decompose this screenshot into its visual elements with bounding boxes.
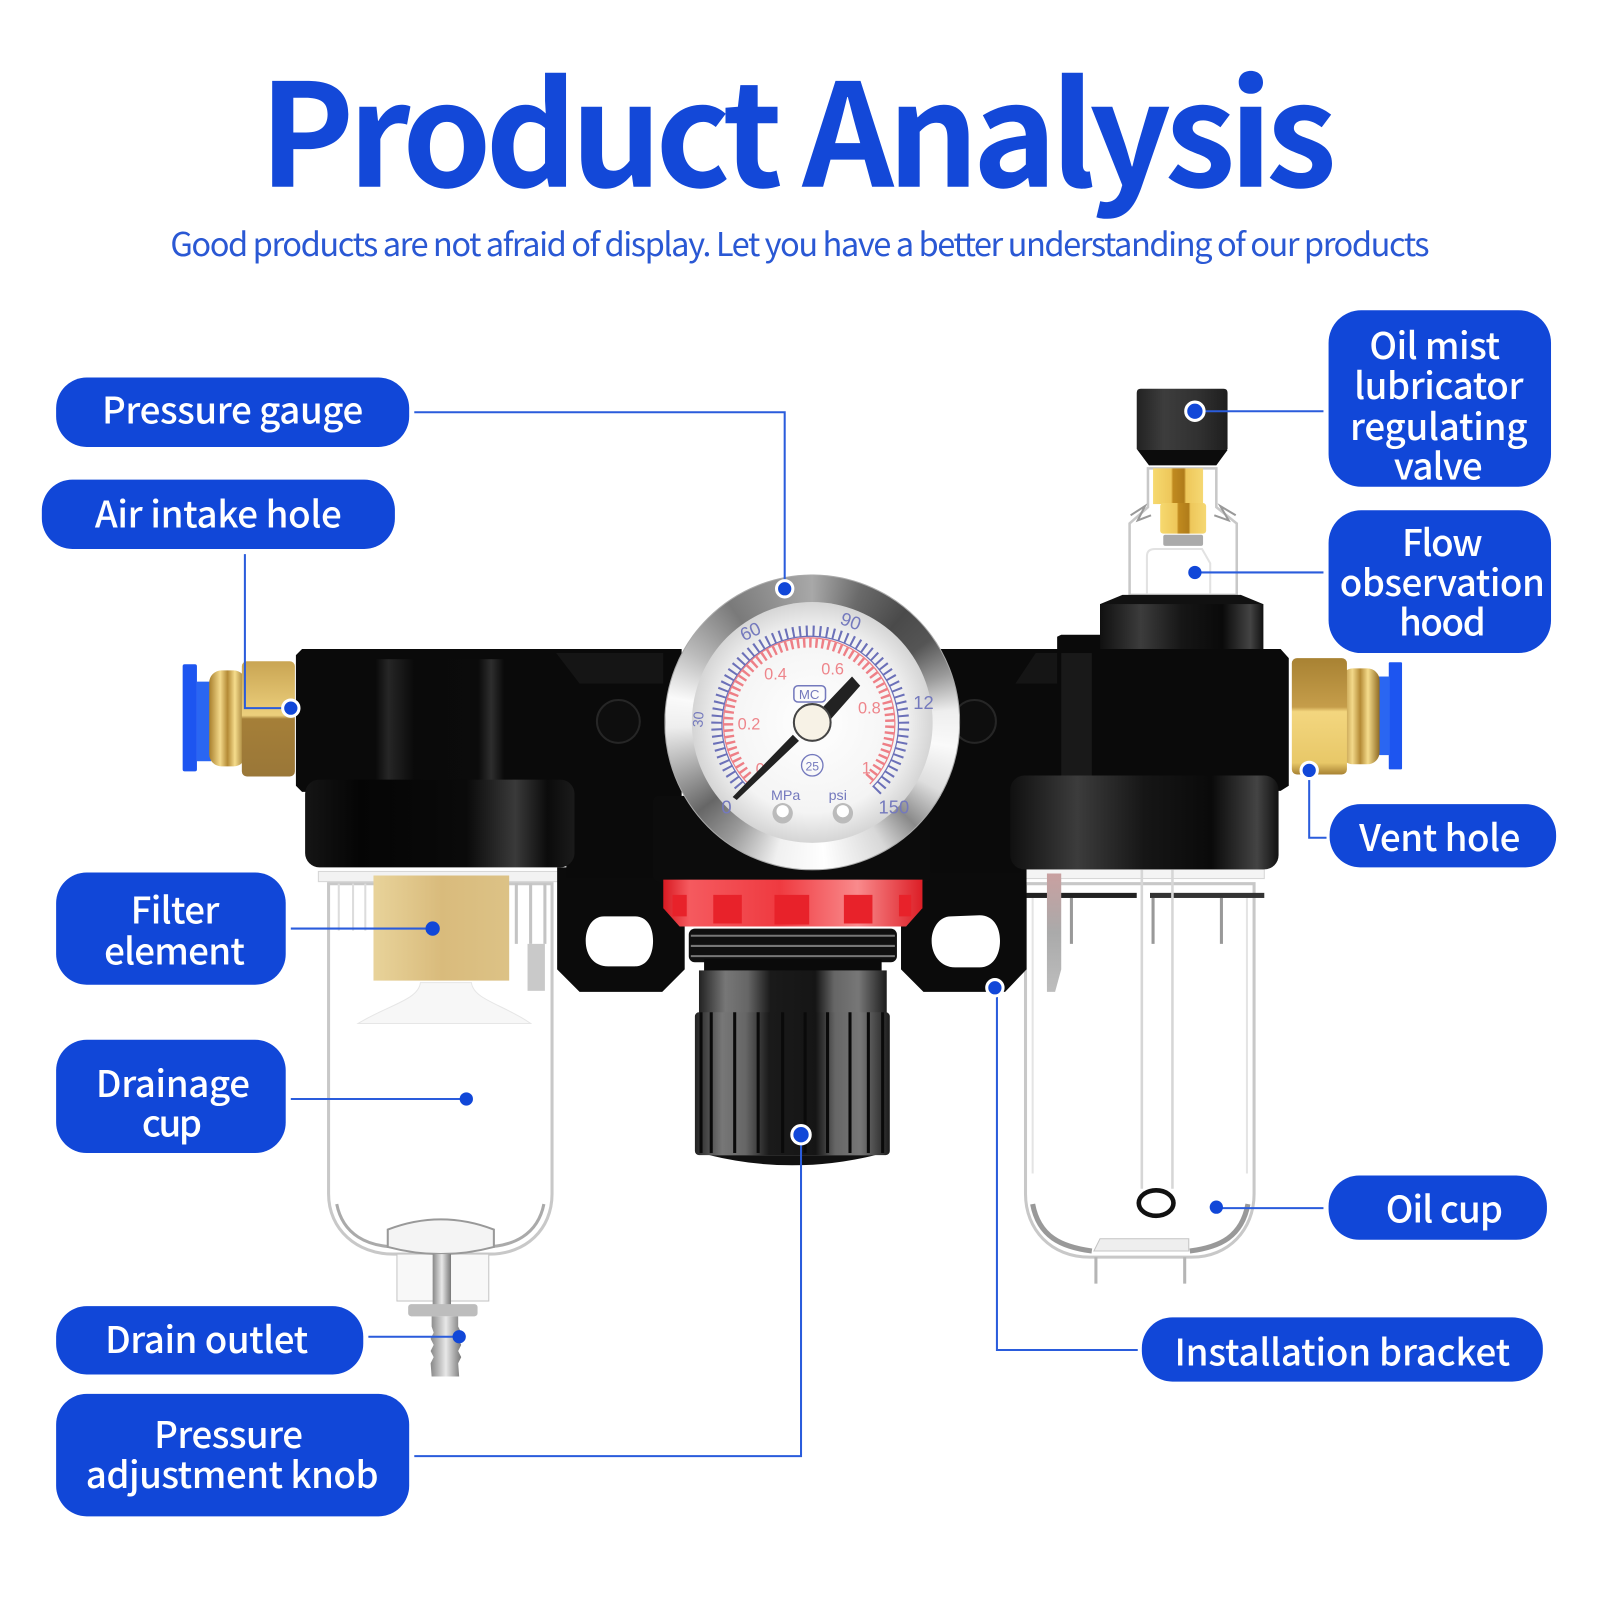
needle hub bbox=[794, 704, 831, 741]
label: oil mist lubricator regulating valve: valve bbox=[1394, 437, 1483, 491]
psi scale bbox=[717, 631, 904, 791]
manifold body bbox=[296, 635, 1289, 882]
baffle bbox=[358, 983, 531, 1023]
dial screws bbox=[772, 803, 853, 823]
label: flow observation hood: Flow bbox=[1402, 513, 1483, 567]
label: pressure adjustment knob bbox=[56, 1394, 409, 1516]
title: Product Analysis bbox=[259, 22, 1337, 229]
label: pressure adjustment knob: Pressure bbox=[154, 1405, 303, 1459]
label: pressure gauge: Pressure gauge bbox=[102, 380, 363, 434]
leader lines bbox=[245, 411, 1327, 1456]
unit labels: psi bbox=[829, 788, 847, 804]
unit labels bbox=[771, 788, 847, 804]
MPa numbers: 0.2 bbox=[738, 716, 760, 734]
psi numbers: 150 bbox=[879, 796, 909, 817]
label: filter element: element bbox=[104, 921, 245, 975]
psi numbers bbox=[690, 608, 934, 817]
label: pressure gauge bbox=[56, 378, 409, 447]
drain valve bbox=[388, 1219, 494, 1377]
label: flow observation hood: observation bbox=[1340, 553, 1545, 607]
MPa numbers: 1 bbox=[862, 759, 871, 777]
MPa scale bbox=[723, 638, 895, 784]
chrome bezel bbox=[664, 574, 960, 870]
label: filter element: Filter bbox=[131, 880, 220, 934]
label: oil mist lubricator regulating valve: regulating bbox=[1350, 397, 1528, 451]
clear filter bowl bbox=[318, 871, 565, 1254]
mounting brackets bbox=[557, 867, 1027, 992]
psi numbers: 60 bbox=[737, 617, 764, 645]
label: drainage cup: cup bbox=[142, 1094, 202, 1148]
accuracy class mark: 25 bbox=[805, 759, 819, 773]
psi numbers: 0 bbox=[721, 796, 732, 817]
marker dots bbox=[283, 402, 1317, 1343]
left end cap bbox=[305, 780, 574, 867]
MPa numbers: 0.6 bbox=[821, 660, 844, 678]
needle bbox=[733, 677, 860, 800]
maker logo bbox=[794, 686, 826, 702]
label: flow observation hood: hood bbox=[1399, 593, 1486, 647]
MPa numbers: 0.4 bbox=[764, 666, 787, 684]
label: filter element bbox=[56, 872, 286, 985]
label: oil mist lubricator regulating valve: Oil mist bbox=[1369, 316, 1500, 370]
clear oil cup bbox=[1019, 867, 1264, 1284]
label: pressure adjustment knob: adjustment knob bbox=[86, 1445, 379, 1499]
label: air intake hole: Air intake hole bbox=[95, 485, 342, 539]
red adjustment collar bbox=[663, 880, 922, 927]
psi numbers: 90 bbox=[838, 608, 864, 634]
product illustration: air filter regulator lubricator unit bbox=[183, 389, 1402, 1377]
label: air intake hole bbox=[42, 480, 395, 549]
right end cap bbox=[1010, 776, 1279, 869]
MPa numbers bbox=[738, 660, 881, 778]
label: oil mist lubricator regulating valve bbox=[1329, 310, 1551, 491]
accuracy class mark bbox=[802, 755, 823, 776]
filter element bbox=[373, 876, 509, 981]
label: flow observation hood bbox=[1329, 510, 1551, 653]
maker logo: MC bbox=[799, 687, 820, 702]
oil tube o-ring bbox=[1139, 1190, 1173, 1216]
psi numbers: 30 bbox=[690, 711, 708, 728]
lubricator neck and sight dome bbox=[1100, 468, 1263, 649]
pressure adjustment knob bbox=[689, 929, 897, 1165]
label: drainage cup bbox=[56, 1040, 286, 1153]
label: vent hole bbox=[1330, 804, 1556, 867]
unit labels: MPa bbox=[771, 788, 800, 804]
label: installation bracket: Installation bracket bbox=[1174, 1322, 1510, 1376]
subtitle: Good products are not afraid of display. Let you have a better understanding of our products bbox=[170, 219, 1430, 266]
label: vent hole: Vent hole bbox=[1358, 808, 1520, 862]
pressure gauge bbox=[664, 574, 960, 870]
right push-in fitting bbox=[1292, 658, 1402, 774]
label: oil cup bbox=[1329, 1176, 1547, 1240]
dial face bbox=[692, 602, 933, 843]
label: oil cup: Oil cup bbox=[1386, 1179, 1503, 1233]
regulating valve cap bbox=[1137, 389, 1228, 465]
psi numbers: 12 bbox=[913, 692, 934, 713]
label: drain outlet: Drain outlet bbox=[105, 1310, 308, 1364]
label: drain outlet bbox=[56, 1306, 363, 1374]
left push-in fitting bbox=[183, 661, 295, 777]
MPa numbers: 0 bbox=[756, 760, 765, 778]
MPa numbers: 0.8 bbox=[858, 699, 881, 717]
label: oil mist lubricator regulating valve: lubricator bbox=[1354, 356, 1524, 410]
label: drainage cup: Drainage bbox=[96, 1054, 250, 1108]
